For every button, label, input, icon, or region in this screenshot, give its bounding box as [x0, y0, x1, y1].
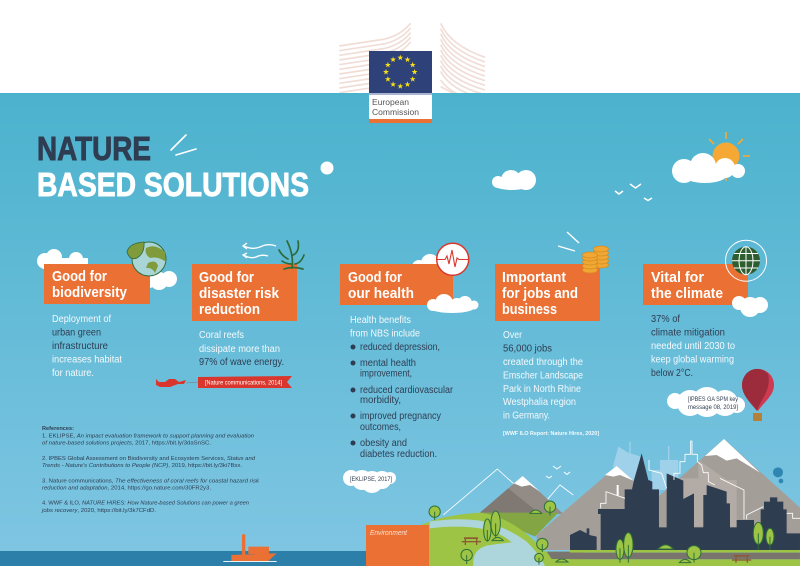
- body text: [503, 330, 583, 422]
- icon: ship: [223, 534, 277, 562]
- icon: sun behind cloud: [672, 132, 750, 183]
- heading: disaster risk: [199, 285, 280, 302]
- source cloud: [667, 387, 745, 417]
- bench left: [462, 537, 481, 545]
- references: [41, 426, 260, 514]
- references: jobs recovery, 2020, https://bit.ly/3k7CFdD.: [41, 508, 156, 514]
- body text: mental health: [360, 358, 416, 369]
- environment tab: [366, 525, 429, 566]
- left mountain: [480, 476, 563, 514]
- cloud behind header: [37, 249, 88, 269]
- heading: Vital for: [651, 269, 704, 286]
- heading: our health: [348, 285, 414, 302]
- icon: coins: [582, 246, 608, 273]
- body text: Health benefits: [350, 315, 411, 326]
- body text: created through the: [503, 357, 583, 368]
- hills and lake: [418, 513, 583, 566]
- body text: [52, 314, 122, 379]
- orange header: [495, 264, 600, 321]
- body text: urban green: [52, 328, 101, 338]
- icon: globe with arrows: [726, 240, 766, 281]
- heading: [502, 269, 578, 318]
- title accent strokes: [171, 135, 196, 155]
- heading: Good for: [348, 269, 402, 286]
- icon: globe with leaf: [127, 242, 166, 276]
- heading: Good for: [52, 268, 107, 285]
- icon: hot air balloon: [742, 369, 774, 421]
- references: of nature-based solutions projects , 2017, https://bit.ly/3daSnSC.: [42, 440, 211, 446]
- heading: biodiversity: [52, 284, 128, 301]
- trees right: [616, 522, 774, 563]
- landscape: [418, 439, 800, 566]
- body text: diabetes reduction.: [360, 449, 437, 460]
- orange header: [340, 264, 453, 305]
- body text: improved pregnancy: [360, 411, 441, 422]
- bench right: [732, 555, 751, 563]
- mountain outlines: [443, 469, 573, 515]
- body text: needed until 2030 to: [651, 341, 735, 352]
- source cloud: [EKLIPSE, 2017]: [350, 477, 392, 483]
- body text: keep global warming: [651, 354, 734, 366]
- source cloud: [IPBES GA SPM key: [688, 397, 738, 403]
- source: [WWF ILO Report: Nature Hires, 2020]: [503, 431, 599, 437]
- cloud: [732, 296, 768, 317]
- body text: 56,000 jobs: [503, 344, 552, 354]
- body text: from NBS include: [350, 328, 420, 340]
- icon: heartbeat: [437, 243, 469, 275]
- heading: [651, 269, 723, 302]
- body text: Park in North Rhine: [503, 384, 581, 395]
- European Commission logo: [369, 51, 432, 123]
- body text: Westphalia region: [503, 397, 576, 408]
- body text: [350, 315, 454, 460]
- body text: outcomes,: [360, 422, 401, 433]
- accent strokes: [558, 232, 579, 251]
- body text: reduced depression,: [360, 342, 440, 353]
- panel: biodiversity: [37, 242, 177, 379]
- body text: in Germany.: [503, 410, 550, 422]
- body text: Deployment of: [52, 314, 111, 325]
- heading: the climate: [651, 285, 723, 302]
- panel: disaster risk: [156, 241, 304, 388]
- icon: waves: [243, 243, 276, 258]
- body text: [199, 330, 284, 368]
- body text: dissipate more than: [199, 344, 280, 355]
- orange header: [44, 264, 150, 304]
- body text: 37% of: [651, 314, 680, 325]
- panel: jobs: [495, 232, 608, 437]
- icon: coral: [279, 241, 304, 269]
- title: [37, 130, 309, 203]
- body text: increases habitat: [52, 354, 122, 366]
- European Commission logo: Commission: [372, 107, 419, 117]
- body text: Emscher Landscape: [503, 370, 583, 382]
- city skyline: [570, 441, 800, 566]
- plane with banner: [Nature communications, 2014]: [205, 380, 282, 386]
- body text: climate mitigation: [651, 328, 725, 338]
- body text: infrastructure: [52, 341, 108, 352]
- cloud right: [141, 271, 177, 290]
- body text: Over: [503, 330, 523, 341]
- sea: [0, 551, 420, 566]
- body text: 97% of wave energy.: [199, 357, 284, 368]
- source cloud: message 08, 2019]: [688, 405, 738, 411]
- body text: morbidity,: [360, 395, 401, 406]
- heading: reduction: [199, 301, 260, 318]
- body text: reduced cardiovascular: [360, 385, 454, 396]
- orange header: [643, 264, 748, 305]
- European Commission logo: European: [372, 97, 409, 107]
- heading: [52, 268, 128, 301]
- panel: climate: [643, 240, 774, 421]
- heading: Important: [502, 269, 566, 286]
- body text: for nature.: [52, 368, 94, 379]
- title: BASED SOLUTIONS: [37, 166, 309, 203]
- references: 1. EKLIPSE, An impact evaluation framework to support planning and evaluation: [42, 434, 254, 440]
- background buildings and mountains: [537, 439, 800, 550]
- trees left: [429, 501, 568, 565]
- references: 4. WWF & ILO, NATURE HIRES: How Nature-based Solutions can power a green: [42, 500, 249, 506]
- heading: Good for: [199, 269, 254, 286]
- references: reduction and adaptation , 2014, https://go.nature.com/30FR2y3.: [42, 486, 211, 492]
- references: References:: [42, 426, 74, 432]
- body text: obesity and: [360, 438, 407, 449]
- title: NATURE: [37, 130, 151, 167]
- birds: [615, 184, 652, 200]
- references: Trends - Nature's Contributions to People (NCP) , 2019, https://bit.ly/3ki7Bsx.: [42, 463, 242, 469]
- environment tab: Environment: [370, 530, 408, 537]
- orange header: [192, 264, 297, 321]
- small cloud dot: [320, 162, 334, 174]
- heading: [199, 269, 280, 318]
- building illustration: [339, 23, 485, 110]
- body text: below 2°C.: [651, 368, 693, 379]
- body text: [651, 314, 735, 379]
- body text: Coral reefs: [199, 330, 244, 341]
- heading: business: [502, 301, 557, 318]
- heading: [348, 269, 414, 302]
- source cloud: [343, 470, 396, 493]
- body text: improvement,: [360, 368, 412, 380]
- references: 3. Nature communications, The effectiveness of coral reefs for coastal hazard risk: [42, 478, 260, 484]
- cloud: centre: [492, 170, 536, 190]
- cloud lower: [427, 294, 478, 313]
- plane with banner: [156, 376, 292, 388]
- birds: [546, 466, 570, 478]
- cloud upper: [412, 254, 447, 275]
- heading: for jobs and: [502, 285, 578, 302]
- references: 2. IPBES Global Assessment on Biodiversity and Ecosystem Services, Status and: [42, 456, 256, 462]
- panel: health: [340, 243, 478, 493]
